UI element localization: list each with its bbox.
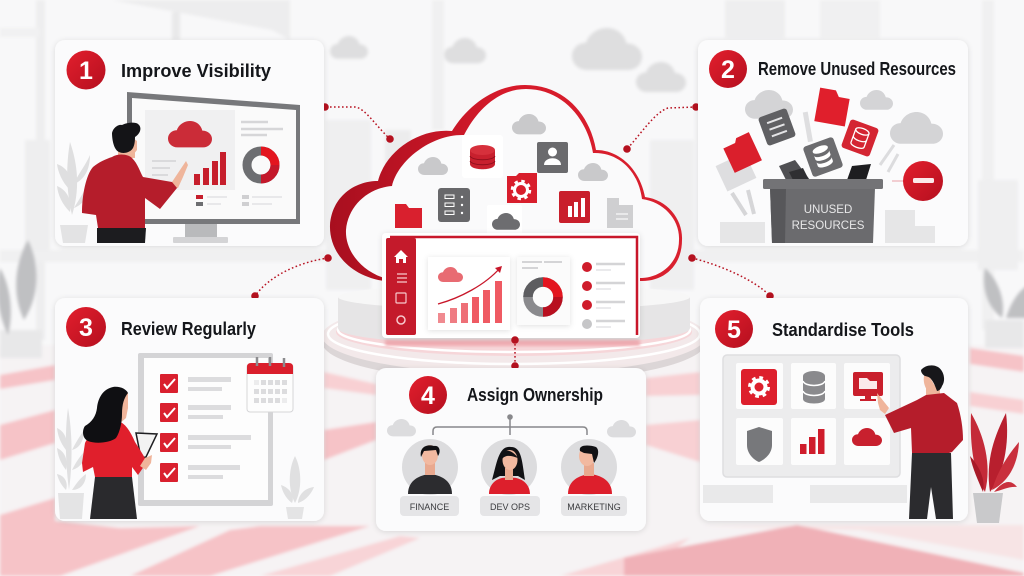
icon: database	[803, 371, 825, 404]
heading 2: Remove Unused Resources	[758, 59, 956, 79]
icon: cloud tile	[487, 205, 522, 237]
label: finance: FINANCE	[410, 502, 449, 512]
monitor	[127, 92, 300, 243]
checklist board	[138, 353, 273, 506]
badge 5: 5	[727, 316, 741, 344]
panel 1: Improve Visibility	[55, 40, 324, 246]
badge 4: 4	[421, 382, 435, 410]
icon: server tile	[438, 188, 470, 222]
badge 1: 1	[79, 57, 93, 85]
badge 2: 2	[721, 56, 735, 84]
icon: database tile	[462, 135, 503, 178]
label: dev ops: DEV OPS	[490, 502, 530, 512]
heading 5: Standardise Tools	[772, 320, 914, 340]
background ghost boxes	[716, 112, 935, 243]
panel 5: Standardise Tools	[700, 298, 1019, 523]
icon: cloud	[852, 428, 882, 446]
icon: gray file	[607, 198, 633, 228]
icon: red folder	[395, 204, 422, 228]
cloud icons small clouds	[418, 114, 608, 181]
label: marketing	[561, 496, 627, 516]
tool board	[723, 355, 900, 477]
checkboxes	[160, 374, 178, 482]
icon: black items in bin	[779, 160, 871, 180]
panel 2: Remove Unused Resources	[698, 40, 968, 246]
label: marketing: MARKETING	[567, 502, 621, 512]
monitor donut	[247, 151, 275, 179]
label: finance	[400, 496, 459, 516]
icon: gear folder	[507, 173, 537, 203]
badge 2	[709, 50, 747, 88]
bin	[763, 179, 883, 243]
icon: flying red folder left	[722, 132, 762, 173]
dotted connectors	[255, 107, 770, 366]
icon: calendar	[247, 357, 293, 412]
person pointing at monitor	[82, 123, 188, 243]
icon: chart tile	[559, 191, 590, 223]
icon: flying server	[758, 108, 796, 146]
potted plant	[970, 413, 1019, 523]
icon: flying gray database	[802, 136, 844, 178]
person with tablet	[82, 387, 157, 519]
small clouds	[387, 419, 636, 437]
badge 3	[66, 307, 106, 347]
person pointing	[877, 365, 963, 519]
badge 4	[409, 376, 447, 414]
gray clouds	[745, 90, 943, 144]
ghost bars	[703, 485, 907, 503]
badge 1	[66, 50, 106, 90]
central cloud	[330, 85, 682, 281]
avatar: finance	[402, 439, 458, 495]
avatar: dev ops	[481, 439, 537, 495]
icon: monitor	[853, 372, 883, 401]
badge 3: 3	[79, 314, 93, 342]
icon: user tile	[537, 142, 568, 173]
plant decoration	[57, 142, 90, 243]
badge 5	[715, 310, 753, 348]
bin: RESOURCES	[792, 220, 865, 232]
floor stripes	[0, 345, 1024, 576]
platform under the cloud	[322, 284, 706, 382]
monitor bars	[194, 152, 226, 185]
panel 3: Review Regularly	[55, 298, 324, 521]
dashboard sidebar	[386, 238, 416, 335]
icon: flying red folder top	[814, 88, 851, 127]
icon: flying red database	[841, 119, 879, 157]
plants	[57, 408, 314, 519]
central dashboard	[382, 233, 640, 338]
cloud red shell	[330, 85, 682, 281]
heading 3: Review Regularly	[121, 319, 256, 339]
connector dots	[251, 103, 774, 370]
label: dev ops	[480, 496, 540, 516]
checklist text lines	[188, 377, 251, 479]
avatar: marketing	[561, 439, 617, 495]
icon: shield	[747, 427, 772, 462]
icon: bar chart	[800, 429, 824, 454]
icon: gear tile	[741, 369, 777, 405]
org connector	[433, 414, 587, 435]
dashboard line and bar chart	[428, 257, 510, 330]
icon: minus circle	[892, 161, 943, 201]
dashboard frame	[390, 237, 637, 335]
cloud white face	[346, 89, 679, 278]
heading 1: Improve Visibility	[121, 61, 271, 81]
heading 4: Assign Ownership	[467, 385, 603, 405]
dashboard donut chart	[517, 257, 570, 325]
dashboard list	[582, 262, 625, 329]
bin: UNUSED	[804, 204, 852, 216]
panel 4: Assign Ownership	[376, 368, 646, 531]
